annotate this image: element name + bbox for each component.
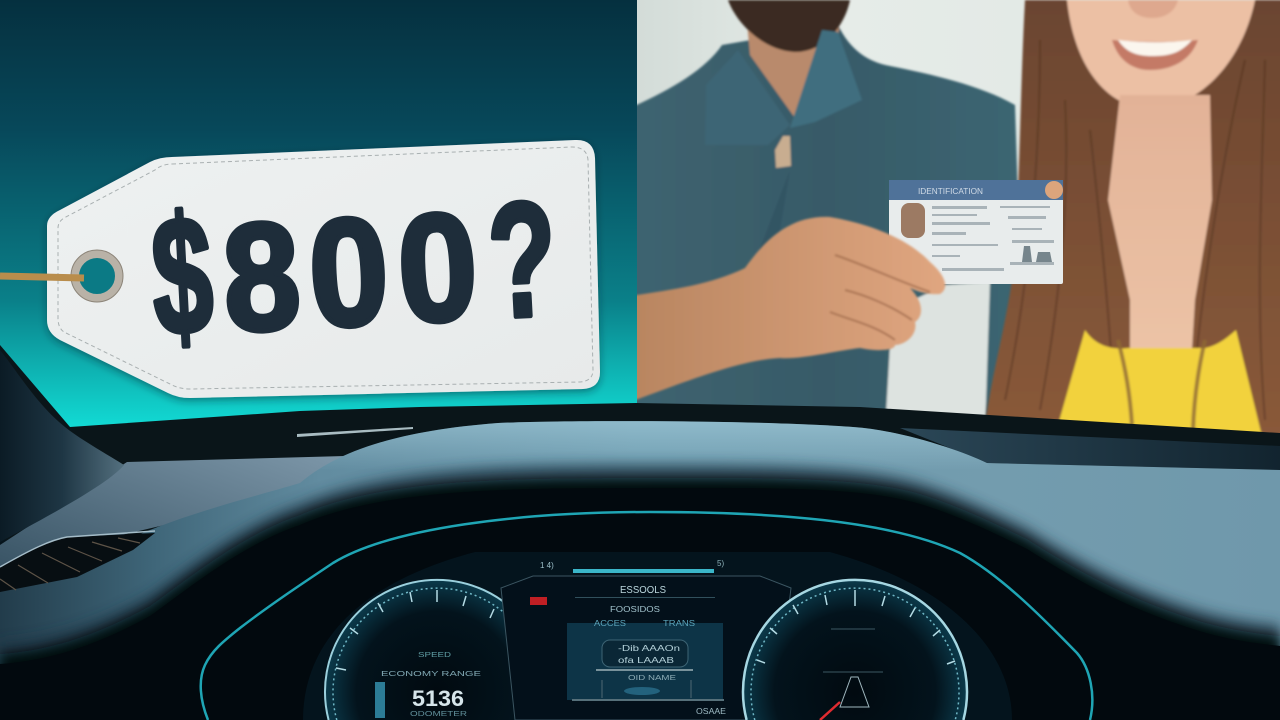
cyan accent line	[201, 512, 1092, 720]
price label: 0	[394, 181, 482, 356]
center display: TRANS	[663, 619, 695, 628]
air vent	[0, 531, 155, 592]
center display: OSAAE	[696, 707, 726, 716]
right upper band	[900, 428, 1280, 470]
strip reflection on band	[297, 427, 413, 437]
price label: ?	[484, 167, 561, 353]
cluster binnacle	[0, 478, 1280, 720]
left gauge	[325, 580, 549, 720]
woman with long hair	[983, 0, 1280, 440]
arm and hand holding card	[630, 217, 945, 402]
eyelet ring	[71, 250, 123, 302]
price label: 0	[305, 185, 393, 360]
price tag with $800?	[0, 140, 600, 398]
instrument hood and right panel	[0, 421, 1280, 720]
cluster screen	[303, 552, 1012, 720]
center display: ESSOOLS	[620, 585, 666, 596]
panel: teal gradient background	[0, 0, 637, 430]
left gauge: SPEED	[418, 652, 451, 659]
hood highlight shading	[300, 421, 1000, 490]
center display: 5)	[717, 559, 724, 568]
background wall	[637, 0, 1280, 180]
center display: FOOSIDOS	[610, 605, 660, 614]
left gauge: ODOMETER	[410, 711, 467, 718]
left dash surface	[0, 456, 345, 585]
dashboard	[0, 345, 1280, 720]
string	[0, 276, 84, 278]
price label: 8	[219, 189, 304, 364]
tag body	[47, 140, 600, 398]
license card	[889, 180, 1063, 284]
windshield edge band	[0, 345, 1280, 540]
center display	[501, 559, 791, 720]
right gauge	[743, 580, 967, 720]
left gauge: ECONOMY RANGE	[381, 671, 482, 678]
price label: $	[147, 180, 217, 371]
left pillar	[0, 350, 124, 542]
center display: OID NAME	[628, 675, 676, 682]
panel: photo of couple holding license	[630, 0, 1280, 440]
hood underside shadow	[0, 464, 1280, 680]
man with teal shirt	[630, 0, 1020, 432]
center display: ofa LAAAB	[618, 656, 674, 665]
left gauge: 5136	[412, 686, 464, 711]
license card: IDENTIFICATION	[918, 187, 983, 196]
center display: ACCES	[594, 619, 626, 628]
price label	[147, 162, 561, 371]
center display: 1 4)	[540, 561, 554, 570]
center display: -Dib AAAOn	[618, 644, 680, 653]
